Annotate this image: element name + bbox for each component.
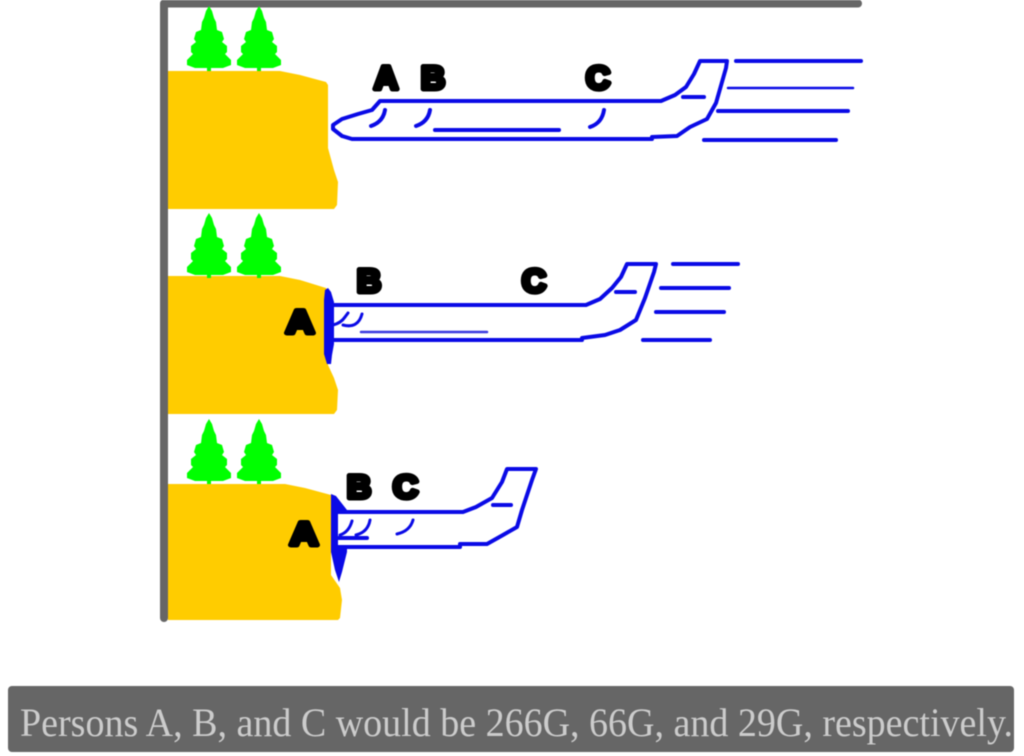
trees 3 [187, 419, 281, 484]
labels 3 [290, 469, 418, 552]
labels 2: B [357, 263, 381, 299]
labels 3: B [347, 469, 371, 505]
labels 3: A [290, 516, 318, 552]
labels 1 [374, 60, 610, 96]
cliff 1 [168, 71, 338, 209]
labels 2: A [286, 304, 314, 340]
panel: plane approaching cliff [168, 6, 861, 209]
speed lines 1 [704, 61, 861, 140]
airplane 3 [331, 469, 536, 582]
panel: plane crushed against cliff [168, 419, 536, 620]
labels 1: A [374, 60, 398, 96]
airplane 1 [333, 61, 727, 139]
caption bar [8, 686, 1014, 752]
labels 2 [286, 263, 546, 340]
panel: nose hits cliff [168, 213, 738, 414]
speed lines 2 [643, 264, 738, 340]
frame [164, 4, 858, 618]
labels 3: C [393, 469, 418, 505]
trees 2 [187, 213, 281, 278]
airplane 2 [324, 264, 656, 364]
trees 1 [187, 6, 281, 71]
labels 2: C [522, 263, 546, 299]
labels 1: B [421, 60, 445, 96]
cliff 2 [168, 276, 338, 414]
cliff 3 [168, 484, 342, 620]
labels 1: C [586, 60, 610, 96]
